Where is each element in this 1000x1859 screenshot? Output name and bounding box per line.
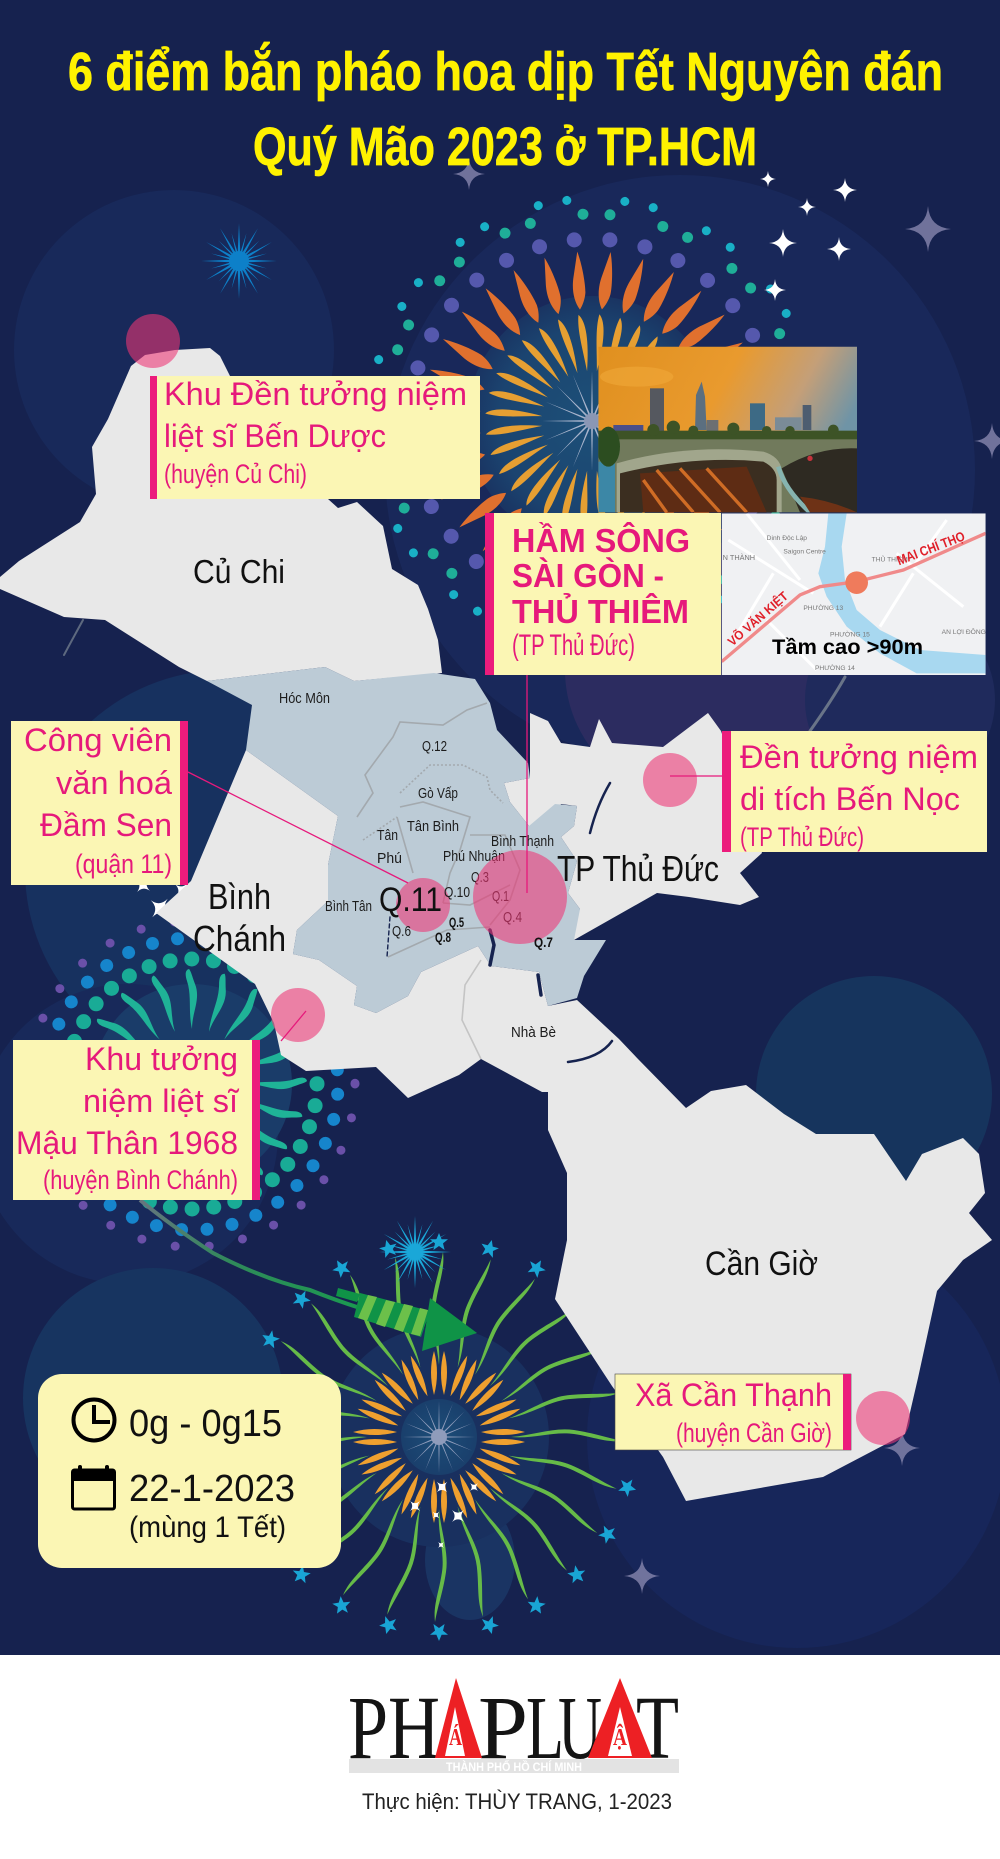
map: district borders <box>357 703 520 1059</box>
panel: Can Thanh commune: Xã Cần Thạnh <box>635 1377 832 1413</box>
text: tunnel location: (TP Thủ Đức) <box>512 629 635 662</box>
marker: Ben Noc <box>643 753 697 807</box>
district labels under markers: Q.3 <box>471 869 489 886</box>
place labels on map: Bình <box>208 876 271 917</box>
footer band <box>0 1655 1000 1859</box>
marker: Ben Duoc <box>126 314 180 368</box>
small white crosses <box>405 1476 482 1551</box>
inset map: road and viewing area: Dinh Độc Lập <box>767 535 807 542</box>
heading: tunnel name: HẦM SÔNG <box>512 521 690 559</box>
firework rocket trail <box>140 1200 360 1308</box>
map: Binh Chanh, Nha Be and Can Gio <box>156 750 992 1501</box>
map: inner city districts <box>207 667 606 1013</box>
panel: Mau Than 1968 memorial <box>13 1040 260 1200</box>
logo: Phap Luat: U <box>558 1679 602 1778</box>
place labels on map: Bình Tân <box>325 898 372 915</box>
place labels on map: Phú <box>377 850 402 867</box>
marker: Mau Than memorial <box>271 988 325 1042</box>
panel: Ben Duoc memorial: liệt sĩ Bến Dược <box>164 418 386 454</box>
label: Vo Van Kiet road: VÕ VĂN KIỆT <box>724 588 791 649</box>
logo: Phap Luat <box>348 1678 679 1778</box>
firework: bottom green burst <box>235 1233 643 1641</box>
place labels on map: Cần Giờ <box>705 1245 818 1283</box>
icon: calendar <box>72 1465 115 1509</box>
panel: Ben Noc memorial: Đền tưởng niệm <box>740 739 978 775</box>
map: Cu Chi district <box>0 348 442 703</box>
heading: tunnel name <box>512 521 690 630</box>
panel: Mau Than 1968 memorial: Mậu Thân 1968 <box>16 1125 238 1161</box>
panel: Ben Noc memorial <box>722 731 987 852</box>
panel: date and time <box>38 1374 341 1568</box>
panel: Dam Sen park: Đầm Sen <box>40 807 172 843</box>
logo: Phap Luat: Ậ <box>613 1725 628 1751</box>
inset map: road and viewing area: PHƯỜNG 13 <box>803 603 844 612</box>
label: viewing height: Tầm cao >90m <box>772 636 923 659</box>
inset map: road and viewing area: N THÀNH <box>723 553 755 562</box>
panel: Ben Noc memorial: di tích Bến Nọc <box>740 781 960 817</box>
logo: Phap Luat: T <box>636 1679 679 1778</box>
heading: tunnel name: SÀI GÒN - <box>512 557 664 594</box>
text: date: 22-1-2023 <box>129 1468 295 1510</box>
icon: firework rocket <box>336 1288 477 1351</box>
photo: Saigon River tunnel <box>597 347 857 512</box>
marker: Dam Sen <box>396 878 450 932</box>
marker: Saigon River tunnel <box>473 850 567 944</box>
soft sparkle stars <box>453 158 1000 1594</box>
district labels under markers <box>443 833 554 926</box>
heading: tunnel name: THỦ THIÊM <box>512 593 689 630</box>
place labels on map: Q.10 <box>444 884 470 901</box>
logo: Phap Luat: P <box>478 1679 528 1778</box>
place labels on map: Củ Chi <box>193 553 285 590</box>
title: Quý Mão 2023 ở TP.HCM <box>253 117 757 177</box>
icon: clock <box>74 1400 114 1440</box>
white sparkle stars <box>130 171 857 925</box>
text: lunar date: (mùng 1 Tết) <box>129 1511 286 1544</box>
logo: Phap Luat: THÀNH PHỐ HỒ CHÍ MINH <box>446 1759 582 1774</box>
inset map: road and viewing area: PHƯỜNG 14 <box>815 663 855 672</box>
place labels on map: Nhà Bè <box>511 1024 556 1041</box>
place labels on map: Tân Bình <box>407 818 459 835</box>
map: river channels <box>387 783 612 1062</box>
inset map: road and viewing area: AN LỢI ĐÔNG <box>942 627 986 636</box>
icon: blue star burst <box>201 223 277 299</box>
panel: Dam Sen park <box>11 721 188 885</box>
district labels under markers: Q.4 <box>503 909 522 926</box>
panel: Ben Duoc memorial: (huyện Củ Chi) <box>164 459 307 489</box>
logo: Phap Luat: PH <box>348 1679 440 1778</box>
district labels under markers: Bình Thạnh <box>491 833 554 850</box>
place labels on map: Tân <box>377 827 398 844</box>
title <box>68 42 943 177</box>
panel: Can Thanh commune: (huyện Cần Giờ) <box>676 1418 832 1448</box>
place labels on map: Q.11 <box>379 881 442 919</box>
leader lines <box>188 675 725 1041</box>
place labels on map: Q.6 <box>392 923 411 940</box>
panel: Mau Than 1968 memorial: Khu tưởng <box>85 1041 238 1077</box>
panel: Ben Duoc memorial <box>150 376 480 499</box>
place labels on map: TP Thủ Đức <box>557 848 719 889</box>
map: Thu Duc city <box>504 713 762 940</box>
place labels on map <box>193 553 818 1283</box>
place labels on map: Q.5 <box>449 914 464 930</box>
logo: Phap Luat: Á <box>449 1725 462 1751</box>
place labels on map: Q.12 <box>422 738 447 755</box>
panel: Ben Duoc memorial: Khu Đền tưởng niệm <box>164 376 467 412</box>
background glow circles <box>0 175 1000 1648</box>
label: Mai Chi Tho road: MAI CHÍ THỌ <box>895 528 967 568</box>
map of Ho Chi Minh City <box>0 348 992 1501</box>
panel: Ben Noc memorial: (TP Thủ Đức) <box>740 822 864 852</box>
place labels on map: Chánh <box>193 918 286 959</box>
firework: left teal burst <box>29 921 355 1247</box>
place labels on map: Q.7 <box>534 934 553 950</box>
district labels under markers: Phú Nhuận <box>443 848 505 865</box>
logo: Phap Luat: L <box>526 1679 564 1778</box>
inset map: road and viewing area: THỦ THIÊM <box>872 555 908 564</box>
panel: Mau Than 1968 memorial: niệm liệt sĩ <box>83 1083 240 1119</box>
panel: Can Thanh commune <box>615 1374 851 1450</box>
comet streaks <box>64 620 845 731</box>
place labels on map: Q.8 <box>435 929 451 945</box>
panel: Mau Than 1968 memorial: (huyện Bình Chánh) <box>43 1165 238 1195</box>
district labels under markers: Q.1 <box>492 888 509 905</box>
credit line: Thực hiện: THÙY TRANG, 1-2023 <box>362 1789 672 1814</box>
inset map: road and viewing area <box>722 513 986 675</box>
place labels on map: Gò Vấp <box>418 785 458 802</box>
inset map: road and viewing area: Saigon Centre <box>783 548 826 555</box>
panel: Dam Sen park: văn hoá <box>56 765 172 801</box>
panel: Ham song Sai Gon - Thu Thiem <box>485 513 721 675</box>
place labels on map: Hóc Môn <box>279 690 330 707</box>
marker: Can Thanh <box>856 1391 910 1445</box>
icon: cyan star burst <box>379 1216 451 1288</box>
firework: top orange burst <box>323 152 861 690</box>
text: time: 0g - 0g15 <box>129 1403 282 1445</box>
panel: Dam Sen park: Công viên <box>24 722 172 758</box>
panel: Dam Sen park: (quận 11) <box>75 849 172 879</box>
inset map: road and viewing area: PHƯỜNG 15 <box>830 630 870 639</box>
